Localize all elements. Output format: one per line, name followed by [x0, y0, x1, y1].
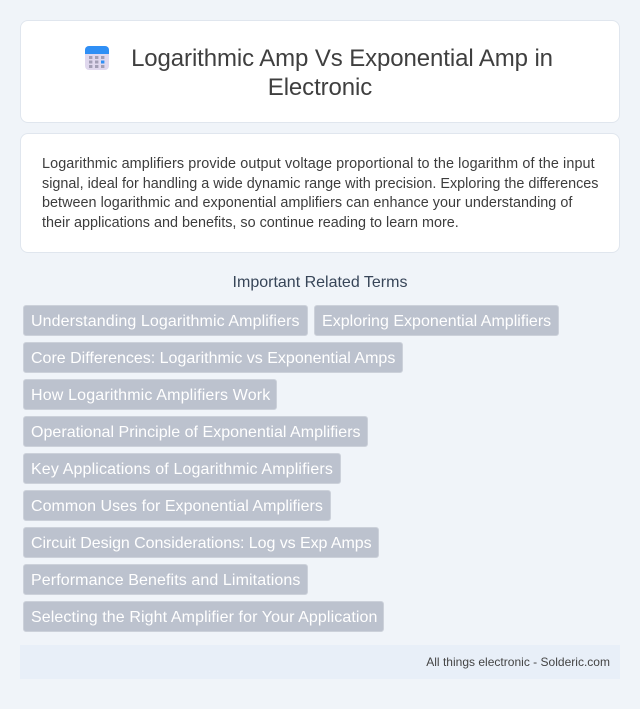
- tag 10: Selecting the Right Amplifier for Your Application: [31, 609, 378, 626]
- tag 5: Operational Principle of Exponential Amplifiers: [31, 424, 361, 441]
- title: Logarithmic Amp Vs Exponential Amp in: [131, 45, 553, 72]
- tag 6: Key Applications of Logarithmic Amplifiers: [31, 461, 333, 478]
- section heading: Important Related Terms: [233, 274, 407, 291]
- intro paragraph: signal, ideal for handling a wide dynamic range with precision. Exploring the differences: [42, 176, 598, 192]
- intro paragraph: between logarithmic and exponential amplifiers can enhance your understanding of: [42, 195, 572, 211]
- icon: calendar app: [85, 46, 109, 70]
- tag 5: [23, 416, 368, 447]
- tag 8: [23, 527, 379, 558]
- tag 2: [314, 305, 559, 336]
- footer bar: All things electronic - Solderic.com: [426, 655, 610, 669]
- title: [131, 45, 553, 101]
- tag 10: [23, 601, 384, 632]
- tag 7: [23, 490, 331, 521]
- tag 6: [23, 453, 341, 484]
- tag 1: Understanding Logarithmic Amplifiers: [31, 313, 300, 330]
- intro paragraph: Logarithmic amplifiers provide output voltage proportional to the logarithm of the input: [42, 156, 595, 172]
- footer bar: [20, 645, 620, 679]
- tag 1: [23, 305, 308, 336]
- tag 4: [23, 379, 277, 410]
- tag 9: [23, 564, 308, 595]
- header panel: [20, 20, 620, 123]
- tag 8: Circuit Design Considerations: Log vs Exp Amps: [31, 535, 372, 552]
- title: Electronic: [268, 74, 372, 101]
- intro paragraph: [42, 156, 598, 230]
- intro paragraph: their applications and benefits, so continue reading to learn more.: [42, 214, 459, 230]
- tag 7: Common Uses for Exponential Amplifiers: [31, 498, 323, 515]
- tag 3: [23, 342, 403, 373]
- tag 3: Core Differences: Logarithmic vs Exponential Amps: [31, 350, 395, 367]
- tag 9: Performance Benefits and Limitations: [31, 572, 301, 589]
- tag 4: How Logarithmic Amplifiers Work: [31, 387, 270, 404]
- tag 2: Exploring Exponential Amplifiers: [322, 313, 551, 330]
- intro text panel: [20, 133, 620, 253]
